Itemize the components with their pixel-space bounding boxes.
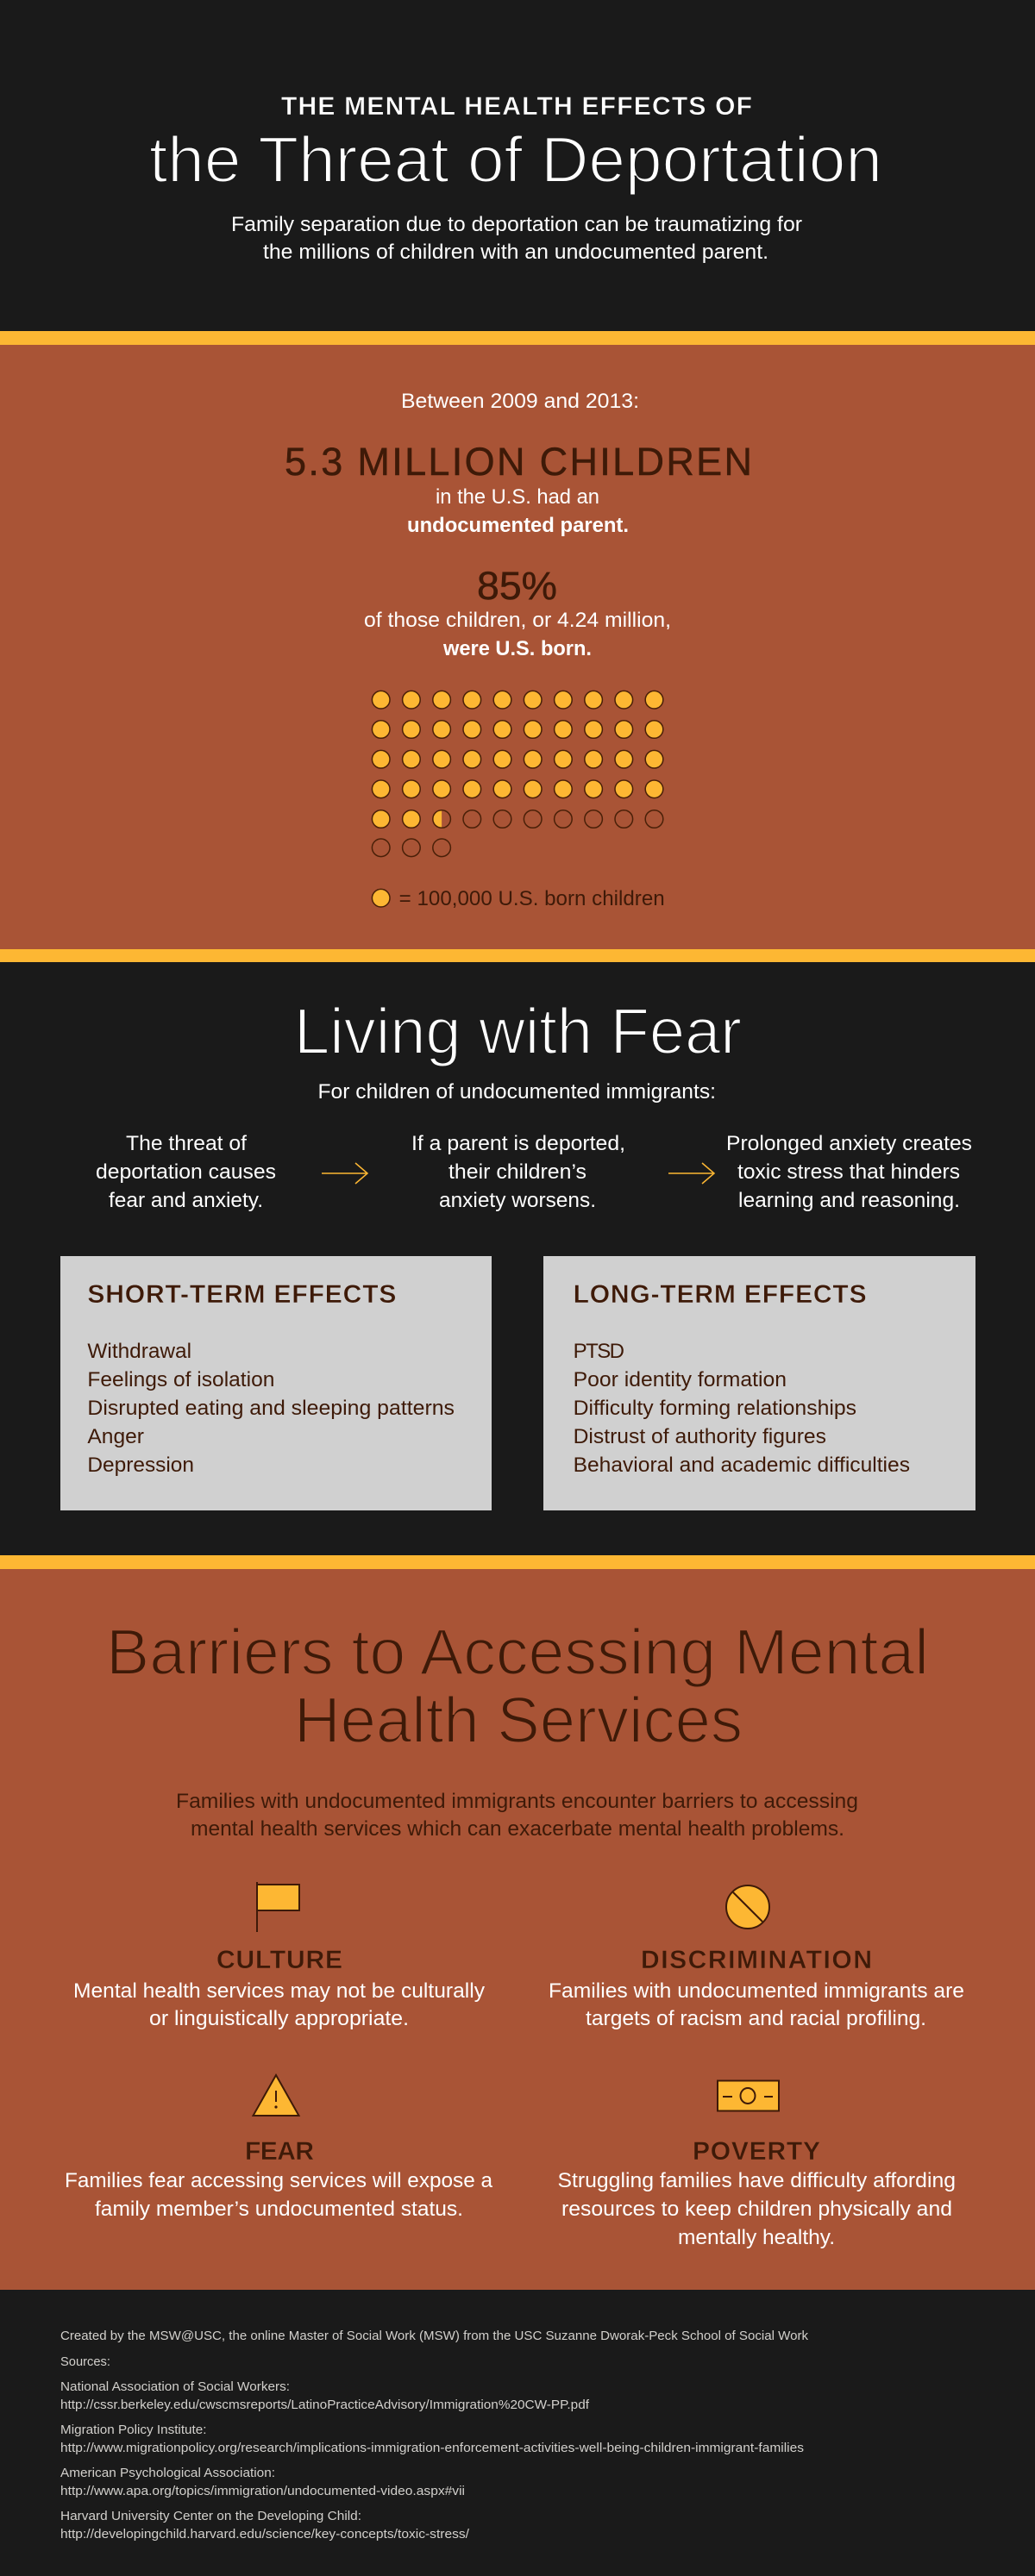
list: long-term effects <box>574 1340 910 1477</box>
barrier: fear <box>65 2137 493 2221</box>
text: sources: Migration Policy Institute: <box>60 2423 207 2437</box>
icon: prohibition sign <box>726 1885 769 1929</box>
icon: flag <box>257 1882 299 1932</box>
text: sources: Sources: <box>60 2354 110 2369</box>
barrier: culture: CULTURE <box>216 1946 342 1974</box>
text: date range: Between 2009 and 2013: <box>401 390 639 413</box>
stat: 85 percent: of those children, or 4.24 million, <box>364 609 671 632</box>
text: step three: learning and reasoning. <box>738 1189 960 1212</box>
barrier: poverty: POVERTY <box>693 2137 820 2166</box>
text: sources: National Association of Social Workers: <box>60 2379 290 2394</box>
stat: 85 percent: 85% <box>477 564 557 608</box>
barrier: discrimination: targets of racism and racial profiling. <box>586 2007 926 2030</box>
text: sources: http://www.migrationpolicy.org/research/implications-immigration-enforcement-activities-well-being-children-immigrant-families <box>60 2441 804 2455</box>
stat: 5.3 million children: 5.3 MILLION CHILDREN <box>285 440 752 484</box>
stat: 5.3 million children <box>285 440 752 537</box>
list: long-term effects: Poor identity formation <box>574 1368 787 1391</box>
text: step one: The threat of <box>126 1132 247 1155</box>
arrow: step two to three <box>668 1163 714 1184</box>
title: the Threat of Deportation <box>149 123 882 196</box>
stat: 85 percent: were U.S. born. <box>442 637 592 660</box>
barrier: poverty: Struggling families have difficulty affording <box>557 2169 956 2192</box>
list: short-term effects: Withdrawal <box>87 1340 191 1363</box>
barrier: poverty: mentally healthy. <box>678 2226 835 2249</box>
barrier: culture <box>73 1946 485 2030</box>
text: step three <box>726 1132 972 1212</box>
text: step two: their children’s <box>448 1160 586 1184</box>
barrier: poverty <box>557 2137 956 2249</box>
text: credit: Created by the MSW@USC, the online Master of Social Work (MSW) from the USC Suzanne Dworak-Peck School of Social Work <box>60 2329 808 2343</box>
text: sources <box>60 2354 804 2542</box>
text: step three: Prolonged anxiety creates <box>726 1132 972 1155</box>
barrier: fear: Families fear accessing services will expose a <box>65 2169 493 2192</box>
text: sources: American Psychological Association: <box>60 2466 275 2480</box>
text: step two <box>411 1132 625 1212</box>
heading: barriers to accessing mental health services: Health Services <box>294 1684 743 1756</box>
text: for children of undocumented immigrants: For children of undocumented immigrants: <box>317 1080 716 1104</box>
panel: footer and sources <box>0 2290 1035 2576</box>
list: short-term effects: Feelings of isolation <box>87 1368 274 1391</box>
intro text: Family separation due to deportation can be traumatizing for <box>231 213 802 236</box>
list: short-term effects: Anger <box>87 1425 144 1448</box>
icon: banknote <box>718 2081 779 2110</box>
text: step one: fear and anxiety. <box>109 1189 263 1212</box>
text: barriers intro: mental health services which can exacerbate mental health problems. <box>191 1817 844 1841</box>
intro text: the millions of children with an undocumented parent. <box>263 241 768 264</box>
barrier: culture: Mental health services may not be culturally <box>73 1979 485 2003</box>
barrier: discrimination <box>549 1946 964 2030</box>
arrow: step one to two <box>322 1163 367 1184</box>
list: short-term effects: Depression <box>87 1454 194 1477</box>
heading: living with fear: Living with Fear <box>294 995 742 1067</box>
legend: = 100,000 U.S. born children <box>399 887 665 910</box>
barrier: poverty: resources to keep children physically and <box>561 2198 952 2221</box>
heading: barriers to accessing mental health services: Barriers to Accessing Mental <box>106 1616 929 1688</box>
heading: long-term effects: LONG-TERM EFFECTS <box>574 1280 867 1309</box>
panel: statistics <box>0 345 1035 949</box>
barrier: fear: family member’s undocumented status. <box>95 2198 463 2221</box>
list: long-term effects: Difficulty forming relationships <box>574 1397 856 1420</box>
heading: short-term effects: SHORT-TERM EFFECTS <box>87 1280 396 1309</box>
icon: warning triangle <box>254 2075 298 2116</box>
chart: dot pictogram <box>372 691 663 857</box>
list: long-term effects: PTSD <box>574 1340 624 1363</box>
heading: barriers to accessing mental health services <box>106 1616 929 1756</box>
text: step two: anxiety worsens. <box>439 1189 596 1212</box>
text: barriers intro <box>176 1790 858 1841</box>
text: step one <box>96 1132 276 1212</box>
text: sources: http://developingchild.harvard.edu/science/key-concepts/toxic-stress/ <box>60 2527 470 2542</box>
text: barriers intro: Families with undocumented immigrants encounter barriers to accessing <box>176 1790 858 1813</box>
intro text <box>231 213 802 264</box>
text: step three: toxic stress that hinders <box>737 1160 960 1184</box>
text: step one: deportation causes <box>96 1160 276 1184</box>
text: sources: Harvard University Center on the Developing Child: <box>60 2509 361 2523</box>
text: sources: http://www.apa.org/topics/immigration/undocumented-video.aspx#vii <box>60 2484 465 2498</box>
list: short-term effects: Disrupted eating and sleeping patterns <box>87 1397 455 1420</box>
panel: short-term effects <box>60 1256 492 1510</box>
stat: 5.3 million children: in the U.S. had an <box>436 485 599 509</box>
heading: the mental health effects of: THE MENTAL HEALTH EFFECTS OF <box>281 92 752 121</box>
text: step two: If a parent is deported, <box>411 1132 625 1155</box>
panel: living with fear <box>0 962 1035 1555</box>
barrier: discrimination: DISCRIMINATION <box>641 1946 872 1974</box>
barrier: fear: FEAR <box>245 2137 314 2166</box>
stat: 85 percent <box>364 564 671 660</box>
panel: header <box>0 0 1035 331</box>
barrier: discrimination: Families with undocumented immigrants are <box>549 1979 964 2003</box>
panel: barriers <box>0 1569 1035 2290</box>
barrier: culture: or linguistically appropriate. <box>149 2007 409 2030</box>
list: long-term effects: Behavioral and academic difficulties <box>574 1454 910 1477</box>
stat: 5.3 million children: undocumented parent. <box>407 514 629 537</box>
panel: long-term effects <box>543 1256 975 1510</box>
list: long-term effects: Distrust of authority figures <box>574 1425 826 1448</box>
text: sources: http://cssr.berkeley.edu/cwscmsreports/LatinoPracticeAdvisory/Immigration%20CW-PP.pdf <box>60 2398 590 2412</box>
list: short-term effects <box>87 1340 455 1477</box>
